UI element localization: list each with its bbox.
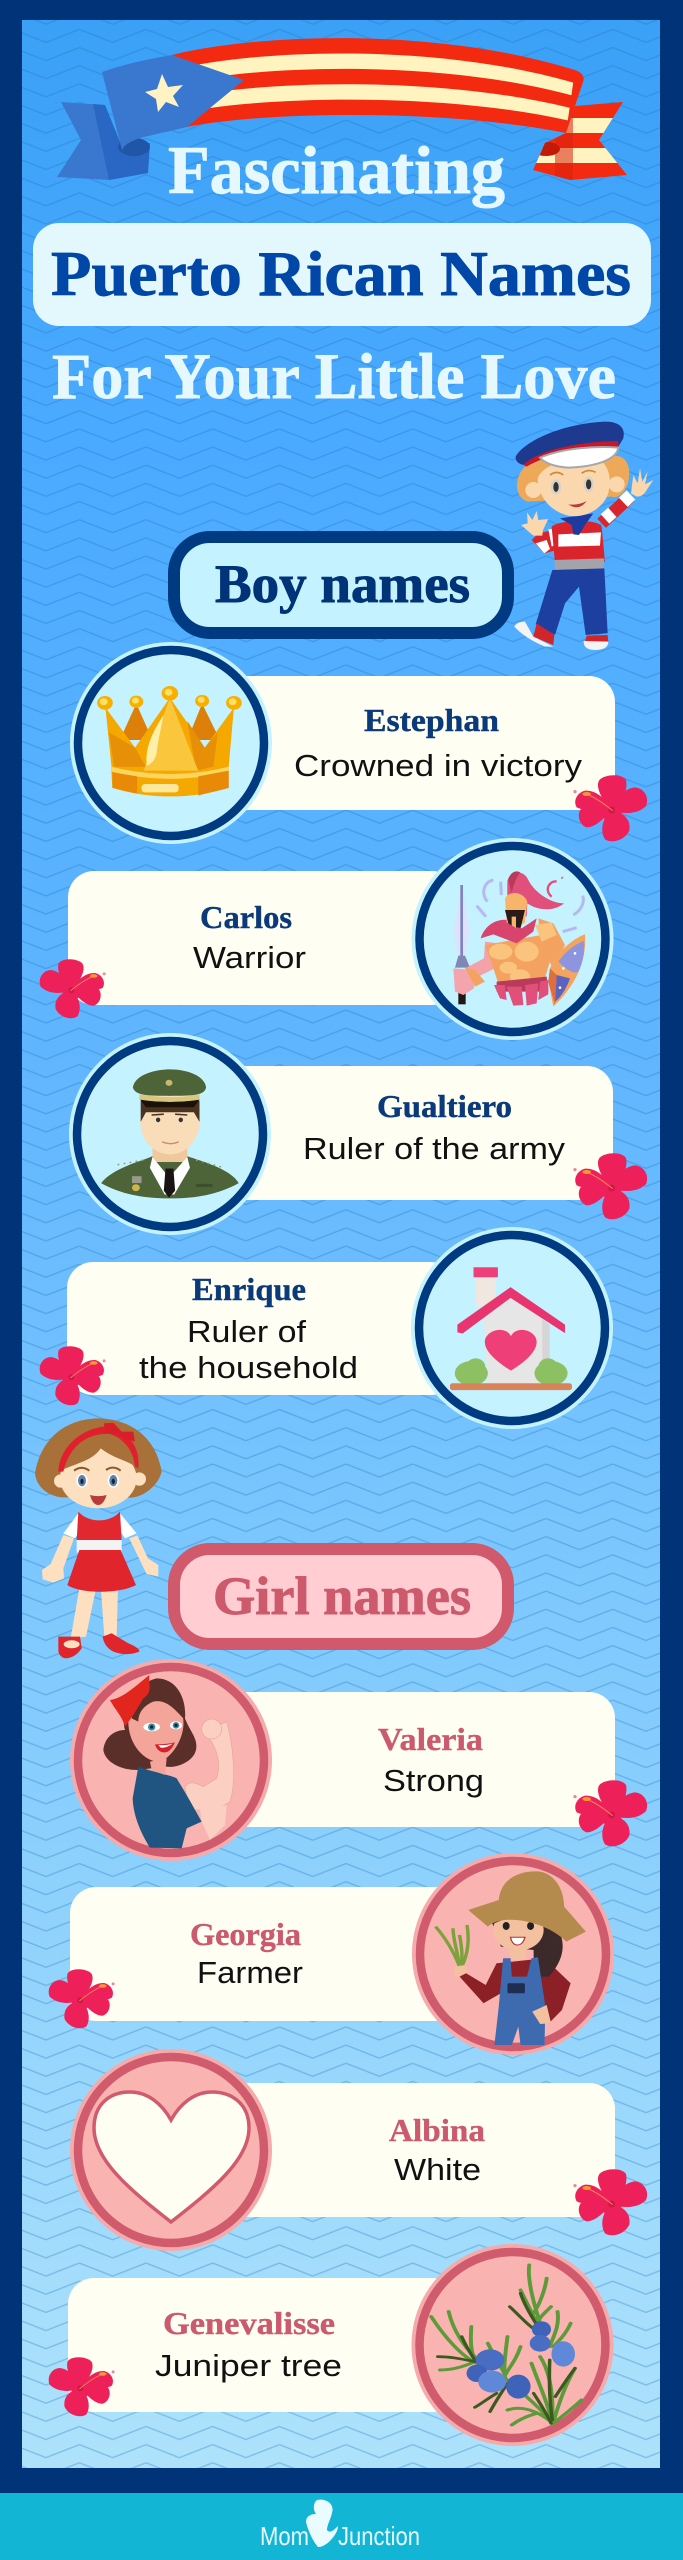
icon: hibiscus flower	[573, 2169, 647, 2235]
panel: Gualtiero	[69, 1033, 647, 1235]
panel: Valeria	[70, 1659, 647, 1861]
icon: hibiscus flower	[49, 2357, 115, 2416]
flag stripes	[172, 38, 584, 133]
star	[145, 74, 183, 112]
icon: warrior in circle	[412, 838, 614, 1040]
title line 3: For Your Little Love	[52, 341, 616, 413]
name card	[68, 2278, 458, 2412]
meaning: Warrior: Warrior	[193, 940, 306, 975]
heading: girl names	[174, 1549, 508, 1644]
title line 1: Fascinating	[168, 132, 505, 208]
logo: MomJunction	[260, 2500, 420, 2551]
heading: girl names: Girl names	[213, 1566, 471, 1626]
name card	[200, 1692, 615, 1827]
meaning: Crowned in victory: Crowned in victory	[294, 748, 583, 783]
name: Carlos: Carlos	[200, 899, 292, 935]
left ribbon tail	[57, 102, 150, 180]
panel: Genevalisse	[49, 2244, 614, 2446]
icon: farmer in circle	[412, 1853, 614, 2055]
name card	[70, 1887, 460, 2021]
name: Valeria: Valeria	[378, 1721, 483, 1757]
name card	[200, 1066, 613, 1200]
icon: hibiscus flower	[40, 959, 106, 1018]
icon: hibiscus flower	[49, 1969, 115, 2028]
footer bar	[0, 2493, 683, 2560]
name: Enrique: Enrique	[192, 1271, 306, 1307]
name card	[67, 1262, 457, 1395]
name card	[68, 871, 458, 1005]
icon: house with heart in circle	[411, 1227, 613, 1429]
name: Genevalisse: Genevalisse	[163, 2305, 335, 2341]
icon: strong woman in circle	[70, 1659, 272, 1861]
panel: Estephan	[70, 642, 647, 844]
meaning: Juniper tree: Juniper tree	[155, 2348, 342, 2383]
name card	[200, 2083, 615, 2217]
meaning: Strong: Strong	[383, 1763, 484, 1798]
name: Albina: Albina	[389, 2112, 485, 2148]
icon: hibiscus flower	[573, 1780, 647, 1846]
icon: juniper branch in circle	[412, 2244, 614, 2446]
logo: MomJunction: Junction	[338, 2521, 420, 2551]
name: Gualtiero: Gualtiero	[377, 1088, 512, 1124]
icon: crown in circle	[70, 642, 272, 844]
right ribbon tail	[533, 102, 627, 180]
meaning: Farmer: Farmer	[197, 1955, 303, 1990]
girl character	[35, 1418, 162, 1658]
flag ribbon banner	[57, 38, 635, 185]
heading: boy names: Boy names	[215, 554, 470, 614]
icon: hibiscus flower	[573, 1153, 647, 1219]
logo: MomJunction: Mom	[260, 2521, 309, 2551]
meaning: Ruler of the household: the household	[139, 1350, 358, 1385]
title line 2: Puerto Rican Names	[51, 238, 631, 309]
panel: Enrique	[40, 1227, 613, 1429]
name card	[200, 676, 615, 810]
panel: Albina	[70, 2049, 647, 2251]
name: Georgia: Georgia	[190, 1916, 301, 1952]
meaning: White: White	[394, 2152, 481, 2187]
icon: white heart in circle	[70, 2049, 272, 2251]
icon: soldier in circle	[69, 1033, 271, 1235]
name: Estephan: Estephan	[364, 702, 499, 738]
boy character	[514, 422, 653, 650]
flag blue triangle	[102, 55, 244, 150]
panel: Carlos	[40, 838, 614, 1040]
panel: Georgia	[49, 1853, 614, 2055]
icon: hibiscus flower	[573, 775, 647, 841]
icon: mother and child	[306, 2500, 338, 2547]
title pill	[33, 223, 651, 326]
meaning: Ruler of the household: Ruler of	[187, 1314, 306, 1349]
meaning: Ruler of the army: Ruler of the army	[303, 1131, 566, 1166]
heading: boy names	[174, 537, 508, 633]
icon: hibiscus flower	[40, 1346, 106, 1405]
